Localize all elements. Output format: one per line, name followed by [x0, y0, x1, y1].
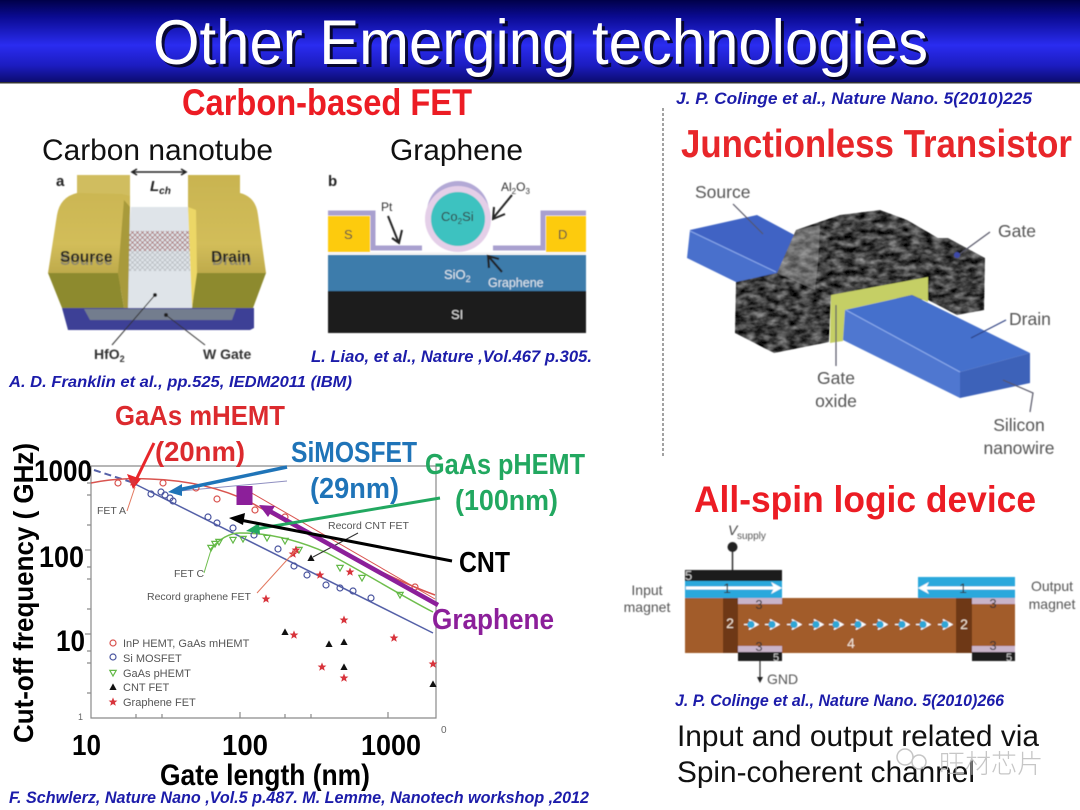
- lilac tunnel layers: 3: [755, 597, 763, 612]
- x axis tick labels: 10: [72, 730, 101, 762]
- citation: Colinge 266: J. P. Colinge et al., Nature Nano. 5(2010)266: [675, 691, 1005, 710]
- graphene marker square: [236, 486, 252, 505]
- gate label: [954, 221, 1036, 258]
- source pad: [328, 213, 422, 252]
- graphene line: [328, 252, 586, 254]
- x axis tick labels: [72, 730, 421, 762]
- title: Other Emerging technologies: [153, 8, 928, 78]
- V supply terminal: supply: [737, 531, 766, 542]
- HfO2 label: HfO: [94, 346, 120, 362]
- Pt label and arrow: [381, 200, 402, 243]
- silicon nanowire label: Silicon: [993, 415, 1045, 435]
- Al2O3 label and arrow: 3: [525, 187, 530, 196]
- brown channel: [685, 598, 1015, 653]
- label: GaAs mHEMT: GaAs mHEMT: [115, 400, 285, 431]
- record graphene annotation: [147, 550, 296, 603]
- input magnet: 5: [685, 568, 692, 583]
- panel letter b: b: [328, 173, 337, 190]
- W gate label: W Gate: [203, 346, 251, 362]
- Al2O3 label and arrow: 2: [512, 187, 517, 196]
- citation: Schwierz and Lemme: F. Schwlerz, Nature Nano ,Vol.5 p.487. M. Lemme, Nanotech workshop ,2012: [9, 789, 589, 807]
- gate label: Gate: [998, 221, 1036, 241]
- legend: Graphene FET: [123, 697, 196, 709]
- source nanowire: [687, 215, 800, 283]
- graphene label and arrow: Graphene: [488, 276, 544, 290]
- label: graphene: Graphene: [390, 134, 523, 167]
- dark contact bars: [723, 598, 972, 653]
- silicon dioxide layer: [328, 255, 586, 291]
- small axis numbers: 0: [441, 725, 447, 736]
- Al2O3 label and arrow: [493, 180, 530, 219]
- Al2O3 label and arrow: O: [516, 180, 525, 194]
- W gate label: [164, 313, 251, 362]
- bottom contacts: 5: [773, 652, 779, 664]
- cobalt silicide nanowire: Si: [462, 209, 474, 224]
- silicon nanowire label: nanowire: [983, 438, 1055, 458]
- FET A annotation: [97, 487, 135, 517]
- heading: carbon-based FET: Carbon-based FET: [182, 82, 472, 123]
- label: GaAs mHEMT: [115, 400, 285, 467]
- label: carbon nanotube: Carbon nanotube: [42, 134, 273, 167]
- y axis tick labels: 100: [39, 541, 84, 574]
- drain pad: D: [558, 227, 567, 242]
- HfO2 label: [94, 293, 157, 364]
- input magnet: 1: [723, 580, 731, 596]
- diagram: graphene FET: [328, 173, 586, 333]
- dark contact bars: 2: [726, 615, 734, 631]
- gate oxide label: [815, 305, 857, 411]
- input magnet label: Input: [631, 582, 663, 598]
- drain label: [971, 309, 1051, 338]
- drain label: Drain: [212, 252, 252, 269]
- diagram: all-spin logic device: [624, 522, 1075, 687]
- dark contact bars: 2: [960, 616, 968, 632]
- drain label: Drain: [211, 249, 251, 266]
- record graphene annotation: Record graphene FET: [147, 591, 251, 603]
- source electrode: [48, 175, 130, 308]
- V supply terminal: V: [728, 522, 739, 538]
- chart: cut-off frequency vs gate length: [8, 400, 585, 792]
- cobalt silicide nanowire: Co: [441, 209, 458, 224]
- divider line: [662, 108, 664, 456]
- y axis tick labels: [34, 455, 92, 658]
- x axis title: Gate length (nm): [160, 759, 370, 792]
- plot frame: [85, 466, 436, 718]
- output magnet label: Output: [1031, 578, 1073, 594]
- drain electrode: [188, 175, 266, 308]
- ground terminal: GND: [767, 671, 798, 687]
- bottom contacts: 5: [1006, 652, 1012, 664]
- label: Graphene: Graphene: [432, 604, 554, 636]
- x axis tick labels: 100: [222, 730, 268, 762]
- label: GaAs pHEMT: [425, 449, 585, 517]
- FET A annotation: FET A: [97, 505, 126, 517]
- record CNT annotation: Record CNT FET: [328, 520, 409, 532]
- label: GaAs pHEMT: GaAs pHEMT: [425, 449, 585, 481]
- lilac tunnel layers: 3: [989, 596, 997, 611]
- output magnet: [918, 577, 1015, 598]
- citation: Franklin: A. D. Franklin et al., pp.525, IEDM2011 (IBM): [8, 374, 352, 391]
- lilac tunnel layers: 3: [989, 638, 997, 653]
- y axis title: Cut-off frequency ( GHz): [8, 443, 39, 743]
- pHEMT trend curve: [210, 533, 433, 612]
- thin reference line: [169, 481, 287, 492]
- arrow: SiMOSFET: [168, 467, 287, 496]
- spin current dots: [744, 620, 952, 630]
- graphene data points: [262, 545, 437, 682]
- nanotube mesh: [128, 231, 190, 271]
- ground terminal: [757, 661, 798, 687]
- output magnet label: [1029, 578, 1075, 612]
- Si MOSFET trend line: [94, 470, 433, 633]
- V supply terminal: [728, 522, 766, 570]
- channel length marker: ch: [159, 186, 171, 197]
- Pt label and arrow: Pt: [381, 200, 393, 214]
- arrow: graphene: [259, 505, 438, 605]
- source pad: S: [344, 227, 353, 242]
- label: GaAs mHEMT: (20nm): [155, 436, 245, 467]
- description text: [677, 720, 1039, 789]
- small axis numbers: 1: [78, 712, 83, 722]
- cobalt silicide nanowire: [425, 181, 491, 252]
- arrow: CNT: [229, 513, 452, 561]
- x axis tick labels: 1000: [361, 730, 421, 762]
- citation: Colinge 225: J. P. Colinge et al., Nature Nano. 5(2010)225: [676, 89, 1033, 108]
- Si MOSFET data points: [148, 489, 374, 601]
- HEMT trend curves: [91, 479, 435, 599]
- diagram: carbon nanotube FET: [48, 169, 266, 364]
- legend: Si MOSFET: [123, 653, 182, 665]
- gate oxide label: oxide: [815, 391, 857, 411]
- channel length marker: [132, 169, 186, 197]
- lilac tunnel layers: [738, 596, 1015, 654]
- CNT data points: [281, 554, 437, 687]
- lilac tunnel layers: 3: [755, 639, 763, 654]
- source label: Source: [695, 182, 750, 202]
- label: CNT: CNT: [459, 547, 510, 579]
- FET C annotation: FET C: [174, 568, 205, 580]
- gate block: [735, 210, 985, 353]
- title: Other Emerging technologies: [156, 11, 931, 81]
- channel length marker: L: [150, 178, 159, 195]
- gate oxide: [830, 277, 928, 343]
- silicon layer: SI: [451, 307, 463, 322]
- input magnet: [685, 568, 782, 598]
- pHEMT data points: [208, 535, 403, 598]
- description text: Input and output related via: [677, 720, 1039, 753]
- cobalt silicide nanowire: 2: [458, 217, 463, 226]
- title banner: [0, 0, 1080, 84]
- channel: [123, 207, 192, 308]
- label: SiMOSFET: SiMOSFET: [291, 437, 417, 469]
- source label: Source: [60, 252, 113, 269]
- silicon layer: [328, 291, 586, 333]
- arrow: GaAs mHEMT: [127, 443, 154, 489]
- graphene label and arrow: [488, 256, 544, 290]
- description text: Spin-coherent channel: [677, 756, 975, 789]
- y axis tick labels: 10: [56, 625, 85, 658]
- source label: Source: [60, 249, 113, 266]
- output magnet label: magnet: [1029, 596, 1075, 612]
- legend: [109, 638, 250, 709]
- legend: CNT FET: [123, 682, 170, 694]
- legend: GaAs pHEMT: [123, 668, 191, 680]
- label: GaAs pHEMT: (100nm): [455, 485, 558, 517]
- InP and GaAs data points: [115, 480, 418, 590]
- drain label: Drain: [1009, 309, 1051, 329]
- label: SiMOSFET: [291, 437, 417, 505]
- panel letter a: a: [56, 173, 65, 190]
- y axis tick labels: 1000: [34, 455, 92, 488]
- citation: Liao: L. Liao, et al., Nature ,Vol.467 p.305.: [311, 348, 592, 366]
- gate oxide label: Gate: [817, 368, 855, 388]
- HfO2 label: 2: [120, 354, 125, 364]
- input magnet label: [624, 582, 670, 615]
- label: SiMOSFET: (29nm): [310, 473, 399, 505]
- silicon dioxide layer: 2: [466, 274, 471, 284]
- Al2O3 label and arrow: Al: [501, 180, 512, 194]
- legend: InP HEMT, GaAs mHEMT: [123, 638, 250, 650]
- input magnet label: magnet: [624, 599, 670, 615]
- watermark: 旺材芯片: [939, 744, 1043, 781]
- small axis numbers: [78, 712, 447, 736]
- FET C annotation: [174, 550, 211, 580]
- silicon dioxide layer: SiO: [444, 267, 466, 282]
- source label: [695, 182, 763, 234]
- heading: all-spin logic device: All-spin logic device: [694, 479, 1036, 520]
- silicon nanowire label: [983, 380, 1055, 458]
- output magnet: 1: [959, 580, 967, 596]
- diagram: junctionless transistor: [687, 182, 1055, 458]
- bottom contacts: [738, 652, 1015, 664]
- drain pad: [493, 213, 586, 252]
- gate base: [62, 308, 254, 330]
- channel number 4: 4: [847, 635, 855, 651]
- arrow: GaAs pHEMT: [246, 498, 440, 534]
- drain nanowire: [843, 295, 1030, 398]
- record CNT annotation: [313, 520, 409, 557]
